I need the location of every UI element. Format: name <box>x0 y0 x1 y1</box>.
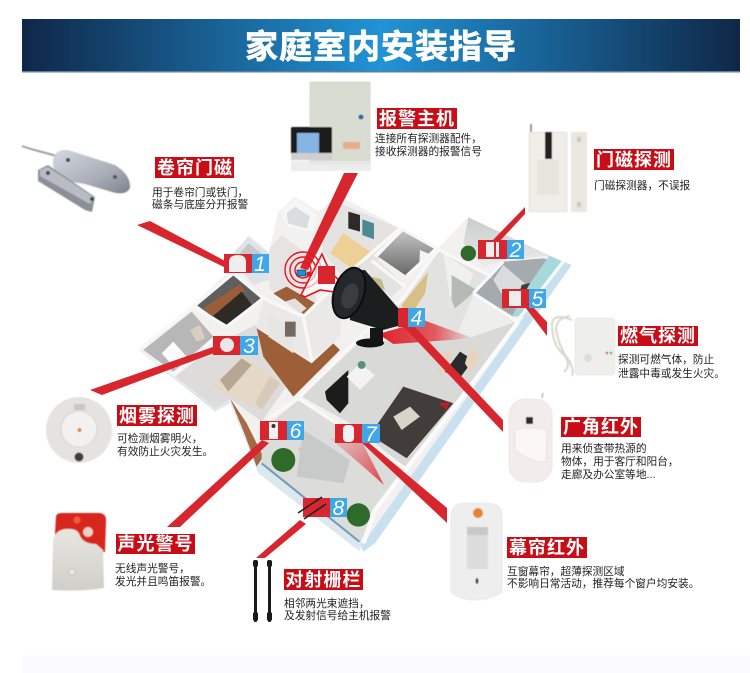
device: infrared beam barrier <box>253 560 272 622</box>
connector: curtain infrared <box>361 442 447 523</box>
connector: smoke detector <box>90 347 214 395</box>
badge 5 <box>502 288 546 311</box>
text: smoke detector: 有效防止火灾发生。 <box>117 445 213 458</box>
long corridor room <box>397 252 517 387</box>
label: roller door magnet: 卷帘门磁 <box>157 157 233 178</box>
badge 4: 4 <box>411 307 422 330</box>
text: curtain infrared detector <box>507 565 699 590</box>
connector: gas detector <box>525 305 547 336</box>
device: door sensor <box>529 124 587 212</box>
top bedroom <box>322 200 400 278</box>
text: alarm control panel <box>375 132 482 158</box>
text: smoke detector <box>117 432 213 458</box>
badge 3: 3 <box>243 335 255 358</box>
text: infrared beam barrier: 相邻两光束遮挡， <box>284 597 370 610</box>
text: gas detector: 探测可燃气体，防止 <box>618 353 715 366</box>
badge 8: 8 <box>333 497 345 520</box>
badge 5: 5 <box>532 288 544 311</box>
label: siren strobe: 声光警号 <box>118 533 194 554</box>
label: smoke detector: 烟雾探测 <box>119 406 195 426</box>
base floor <box>138 195 563 543</box>
text: gas detector: 泄露中毒或发生火灾。 <box>618 367 725 380</box>
text: siren strobe: 发光并且鸣笛报警。 <box>115 575 211 588</box>
badge 2: 2 <box>509 239 522 262</box>
connector: door sensor <box>493 207 525 243</box>
text: curtain infrared detector: 互窗幕帘，超薄探测区域 <box>507 565 625 578</box>
text: alarm control panel: 连接所有探测器配件， <box>375 132 482 145</box>
text: curtain infrared detector: 不影响日常活动，推荐每个窗户均安装。 <box>507 577 699 590</box>
text: wide angle infrared detector: 物体，用于客厅和阳台， <box>561 455 679 468</box>
lower balcony <box>262 400 405 543</box>
title: 家庭室内安装指导 <box>245 28 517 65</box>
blue outer wall <box>360 262 572 552</box>
label: door sensor: 门磁探测 <box>596 150 672 170</box>
floor plan house illustration <box>138 195 572 552</box>
badge 2 <box>478 239 524 262</box>
small room <box>368 262 405 297</box>
red detection cone 7 <box>330 438 384 485</box>
text: siren strobe: 无线声光警号， <box>115 562 190 575</box>
badge 6: 6 <box>290 420 302 443</box>
badge 3 <box>213 335 258 358</box>
device: gas detector <box>552 316 615 376</box>
living room <box>302 322 517 468</box>
badge 7: 7 <box>365 423 378 446</box>
device: alarm control panel <box>291 82 371 171</box>
device: curtain infrared detector <box>451 503 502 600</box>
text: smoke detector: 可检测烟雾明火， <box>117 432 203 445</box>
text: roller door magnet: 磁条与底座分开报警 <box>152 198 249 211</box>
label: infrared beam barrier: 对射栅栏 <box>286 570 362 590</box>
label: alarm control panel: 报警主机 <box>379 109 455 129</box>
connector: roller door sensor <box>137 221 227 267</box>
text: gas detector <box>618 353 725 380</box>
red detection cone 4 <box>378 321 473 344</box>
top balcony <box>280 198 317 232</box>
badge 4 <box>398 307 425 330</box>
text: roller door magnet: 用于卷帘门或铁门， <box>152 186 248 199</box>
text: wide angle infrared detector: 用来侦查带热源的 <box>561 442 647 455</box>
right bathroom <box>473 258 550 317</box>
badge 6 <box>260 420 304 443</box>
text: wide angle infrared detector <box>561 442 679 481</box>
text: roller door magnet <box>152 186 249 211</box>
walls <box>138 228 563 469</box>
text: wide angle infrared detector: 走廊及办公室等地... <box>561 468 655 481</box>
closet <box>378 231 436 276</box>
connector: siren <box>167 440 269 527</box>
device: siren strobe <box>52 513 106 591</box>
device: roller door magnet <box>22 146 130 212</box>
device: wide angle infrared detector <box>509 393 552 482</box>
left balcony <box>230 237 269 285</box>
header banner <box>22 19 740 72</box>
icon: horn speaker <box>327 264 398 348</box>
dark wood room <box>197 275 262 327</box>
badge 1: 1 <box>254 253 266 276</box>
device: smoke detector <box>46 397 112 463</box>
text: alarm control panel: 接收探测器的报警信号 <box>375 145 482 158</box>
text: infrared beam barrier: 及发射信号给主机报警 <box>284 609 391 622</box>
bedroom <box>175 325 300 422</box>
terrace <box>463 217 550 267</box>
connector: beam barrier <box>256 520 306 558</box>
faint bottom band <box>22 655 750 673</box>
badge 1 <box>224 253 269 276</box>
badge 8 <box>298 497 347 520</box>
label: wide angle infrared detector: 广角红外 <box>563 417 639 437</box>
label: gas detector: 燃气探测 <box>620 326 696 346</box>
icon: alarm siren mark <box>285 252 342 297</box>
text: infrared beam barrier <box>284 597 391 622</box>
bathroom <box>143 312 213 372</box>
text: door sensor: 门磁探测器，不误报 <box>594 179 691 192</box>
alarm room wall and floor <box>269 235 317 315</box>
connector: wide angle infrared <box>403 322 503 432</box>
red connector lines <box>90 173 547 558</box>
text: siren strobe <box>115 562 211 588</box>
badge 7 <box>335 423 380 446</box>
connector: alarm panel <box>300 173 358 270</box>
label: curtain infrared detector: 幕帘红外 <box>509 537 585 558</box>
